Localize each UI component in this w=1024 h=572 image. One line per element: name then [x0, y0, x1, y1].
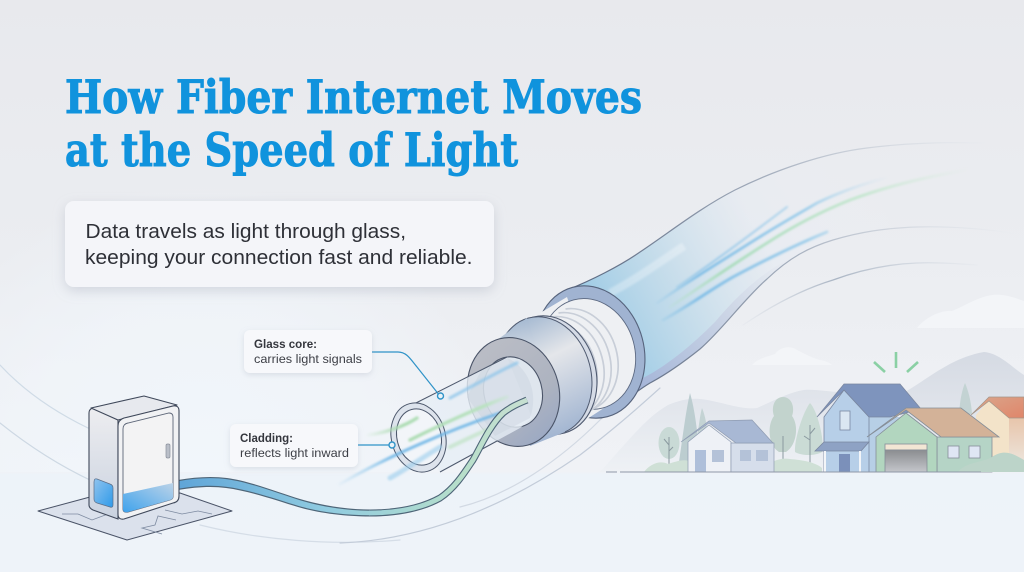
callout: cladding: reflects light inward	[240, 446, 349, 460]
trees	[644, 383, 972, 472]
door blue light	[123, 483, 173, 512]
clouds	[752, 295, 1024, 365]
side window	[94, 479, 113, 507]
house 3 with garage	[867, 408, 999, 472]
callout: glass core	[244, 330, 444, 399]
circuit base plate	[38, 493, 232, 540]
bush	[958, 453, 1024, 472]
house 1	[681, 420, 774, 472]
light streaks through core	[340, 363, 517, 484]
mountains	[600, 352, 1024, 472]
background light arcs	[0, 263, 977, 543]
light streaks in sheath	[657, 170, 967, 320]
subtitle card: Data travels as light through glass,	[86, 220, 406, 243]
title: at the Speed of Light	[65, 123, 519, 177]
cabinet door	[123, 413, 173, 512]
incoming green cable	[178, 400, 527, 516]
subtitle card	[65, 201, 494, 287]
callout: cladding	[230, 424, 395, 467]
icon: signal rays	[874, 352, 918, 372]
title	[65, 70, 642, 177]
callout: cladding: Cladding:	[240, 431, 293, 445]
house 2	[815, 384, 921, 472]
cabinet left side	[89, 408, 118, 519]
silver jacket	[497, 318, 565, 446]
glass tube	[383, 357, 533, 478]
door handle	[166, 444, 170, 458]
server cabinet on circuit base	[38, 396, 232, 540]
house 4	[971, 397, 1024, 472]
subtitle card: keeping your connection fast and reliable.	[85, 246, 472, 269]
grey cladding ring	[455, 327, 572, 457]
core hole	[476, 350, 550, 434]
cabinet top	[91, 396, 177, 420]
fiber cable	[178, 143, 1024, 516]
neighborhood	[606, 383, 1024, 472]
title: How Fiber Internet Moves	[65, 70, 642, 124]
callout: glass core: Glass core:	[254, 337, 317, 351]
ground line	[606, 471, 981, 473]
callout: glass core: carries light signals	[254, 352, 362, 366]
outer tube sheath	[567, 143, 1024, 413]
cabinet front	[118, 406, 179, 519]
jacket collar	[488, 305, 610, 445]
threaded buffer layer	[528, 288, 648, 430]
blue outer band	[520, 273, 660, 431]
